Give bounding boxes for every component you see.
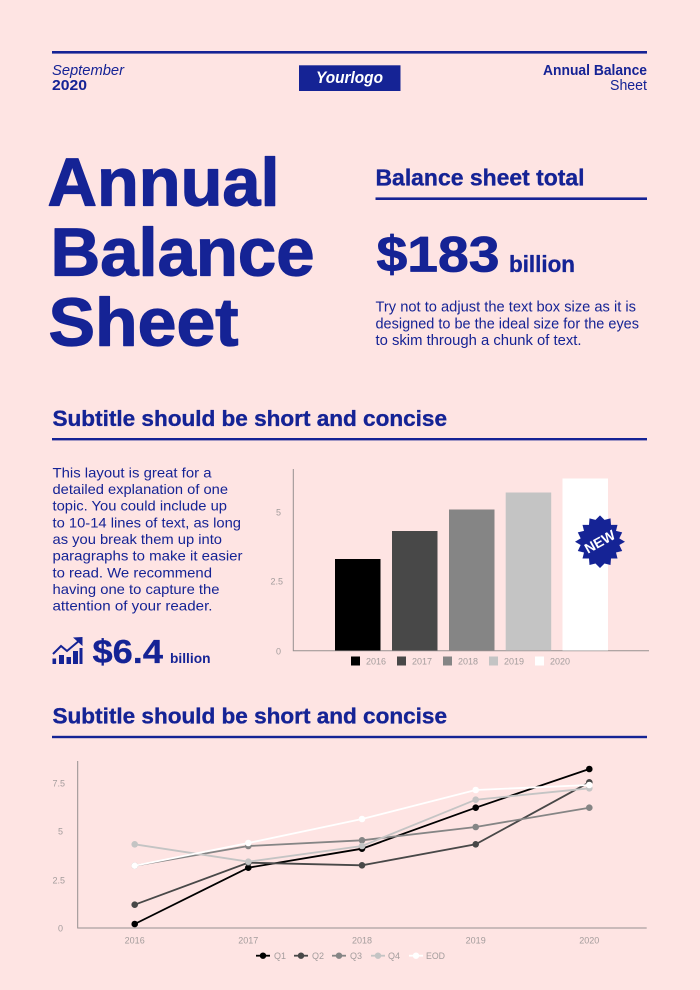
total description: to skim through a chunk of text. xyxy=(376,332,582,349)
badge: new: NEW xyxy=(582,526,619,556)
series: Q3 xyxy=(131,804,593,869)
body text: to 10-14 lines of text, as long xyxy=(52,514,241,530)
bar chart legend: 2019 xyxy=(504,656,524,666)
subtitle 2: Subtitle should be short and concise xyxy=(52,704,447,728)
line chart legend: Q4 xyxy=(388,951,400,961)
badge: new xyxy=(575,515,625,568)
subtitle 1: Subtitle should be short and concise xyxy=(52,406,447,431)
panel: balance sheet total xyxy=(376,165,647,349)
body text: detailed explanation of one xyxy=(52,481,228,497)
bar chart y labels: 0 xyxy=(276,646,281,656)
line chart y labels xyxy=(52,778,65,934)
line chart x labels: 2017 xyxy=(238,936,258,946)
body text: having one to capture the xyxy=(52,581,220,597)
bars xyxy=(335,478,608,650)
line chart x labels: 2018 xyxy=(352,936,372,946)
bar chart axes xyxy=(293,469,649,651)
title: Balance xyxy=(50,214,314,290)
title: Sheet xyxy=(48,284,238,360)
title xyxy=(48,144,314,360)
header xyxy=(52,51,647,94)
line chart legend: Q3 xyxy=(350,951,362,961)
total heading: Balance sheet total xyxy=(376,165,584,191)
line chart legend: Q2 xyxy=(312,951,324,961)
logo xyxy=(299,65,400,91)
bar chart legend: 2020 xyxy=(550,656,570,666)
line chart legend: EOD xyxy=(426,951,445,961)
line chart y labels: 2.5 xyxy=(52,876,65,886)
line chart x labels: 2016 xyxy=(125,936,145,946)
series: Q4 xyxy=(131,785,593,865)
series: Q2 xyxy=(131,779,593,908)
header document name xyxy=(543,63,647,94)
series: Q1 xyxy=(131,766,593,927)
line chart y labels: 5 xyxy=(58,826,63,836)
key figure xyxy=(92,634,210,671)
body text: topic. You could include up xyxy=(52,498,227,514)
body text: as you break them up into xyxy=(52,531,222,547)
bar chart legend: 2018 xyxy=(458,656,478,666)
total figure: billion xyxy=(509,251,575,277)
series: EOD xyxy=(131,782,593,869)
line chart axes xyxy=(78,761,647,928)
key figure: $6.4 xyxy=(92,634,163,671)
total description: Try not to adjust the text box size as it is xyxy=(376,299,636,316)
key figure: billion xyxy=(170,651,210,666)
logo: Yourlogo xyxy=(316,69,383,87)
line chart x labels: 2020 xyxy=(579,936,599,946)
bar chart xyxy=(270,469,649,666)
line chart x labels: 2019 xyxy=(466,936,486,946)
icon: growth chart xyxy=(52,637,82,664)
title: Annual xyxy=(48,144,280,220)
bar chart legend xyxy=(351,656,570,666)
bar chart legend: 2017 xyxy=(412,656,432,666)
body text: to read. We recommend xyxy=(52,564,212,580)
total figure: $183 xyxy=(376,226,500,282)
header document name: Sheet xyxy=(610,78,647,94)
body text xyxy=(52,464,243,614)
bar chart y labels: 2.5 xyxy=(270,576,283,586)
line chart xyxy=(52,761,647,961)
body text: attention of your reader. xyxy=(52,598,212,614)
body text: paragraphs to make it easier xyxy=(52,548,243,564)
bar chart y labels: 5 xyxy=(276,508,281,518)
body text: This layout is great for a xyxy=(52,464,212,480)
bar chart legend: 2016 xyxy=(366,656,386,666)
bar chart y labels xyxy=(270,508,283,656)
line chart legend: Q1 xyxy=(274,951,286,961)
line chart legend xyxy=(256,951,445,961)
total figure xyxy=(376,226,575,282)
header date xyxy=(52,63,125,94)
header document name: Annual Balance xyxy=(543,63,647,79)
header date: September xyxy=(52,63,125,79)
total description xyxy=(376,299,639,349)
line chart y labels: 0 xyxy=(58,924,63,934)
line chart y labels: 7.5 xyxy=(52,778,65,788)
header date: 2020 xyxy=(52,78,87,94)
total description: designed to be the ideal size for the eyes xyxy=(376,315,639,332)
line chart x labels xyxy=(125,936,599,946)
